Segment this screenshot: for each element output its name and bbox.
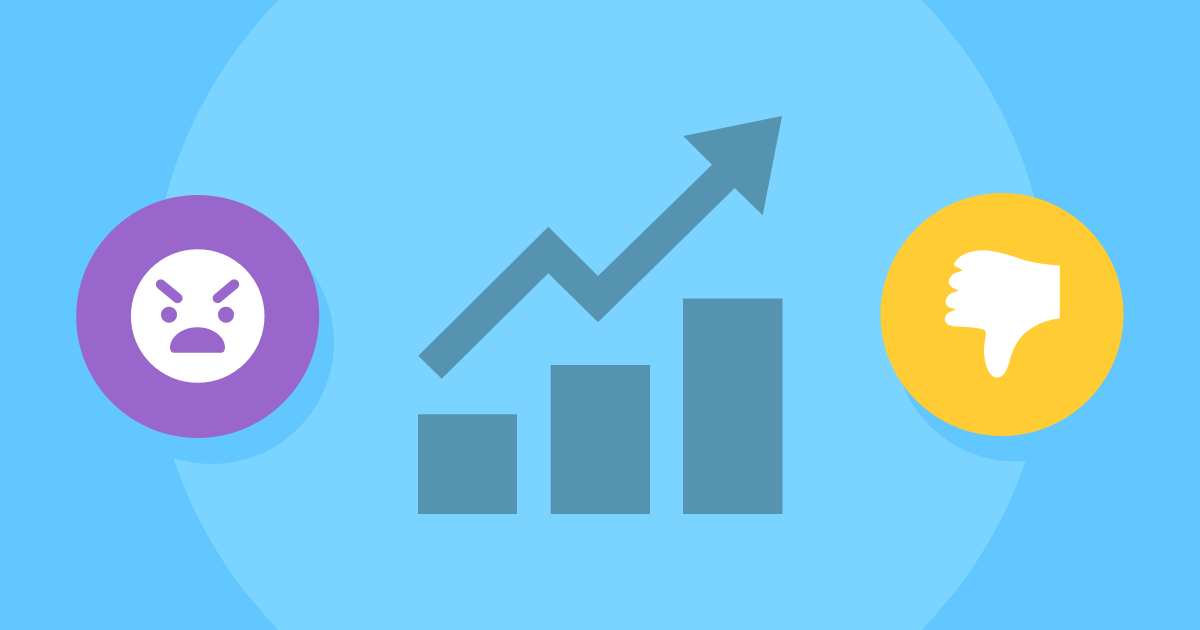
right eye	[218, 307, 234, 323]
bar 1	[418, 414, 517, 514]
thumbs down hand	[945, 250, 1060, 378]
left eyebrow	[161, 284, 178, 298]
bar 3	[683, 298, 782, 514]
bar 2	[551, 365, 650, 514]
rising trend arrow	[418, 116, 782, 379]
right eyebrow	[218, 284, 234, 298]
left eye	[161, 307, 177, 323]
face	[131, 249, 264, 383]
yellow badge	[880, 193, 1124, 436]
large central circle	[150, 0, 1050, 630]
chart: rising bars and arrow	[418, 116, 782, 514]
icon: thumbs down badge	[880, 193, 1138, 462]
badge shadow	[90, 220, 334, 464]
frowning mouth	[170, 327, 225, 353]
icon: angry face badge	[76, 195, 334, 464]
purple badge	[76, 195, 319, 438]
badge shadow	[894, 218, 1138, 462]
